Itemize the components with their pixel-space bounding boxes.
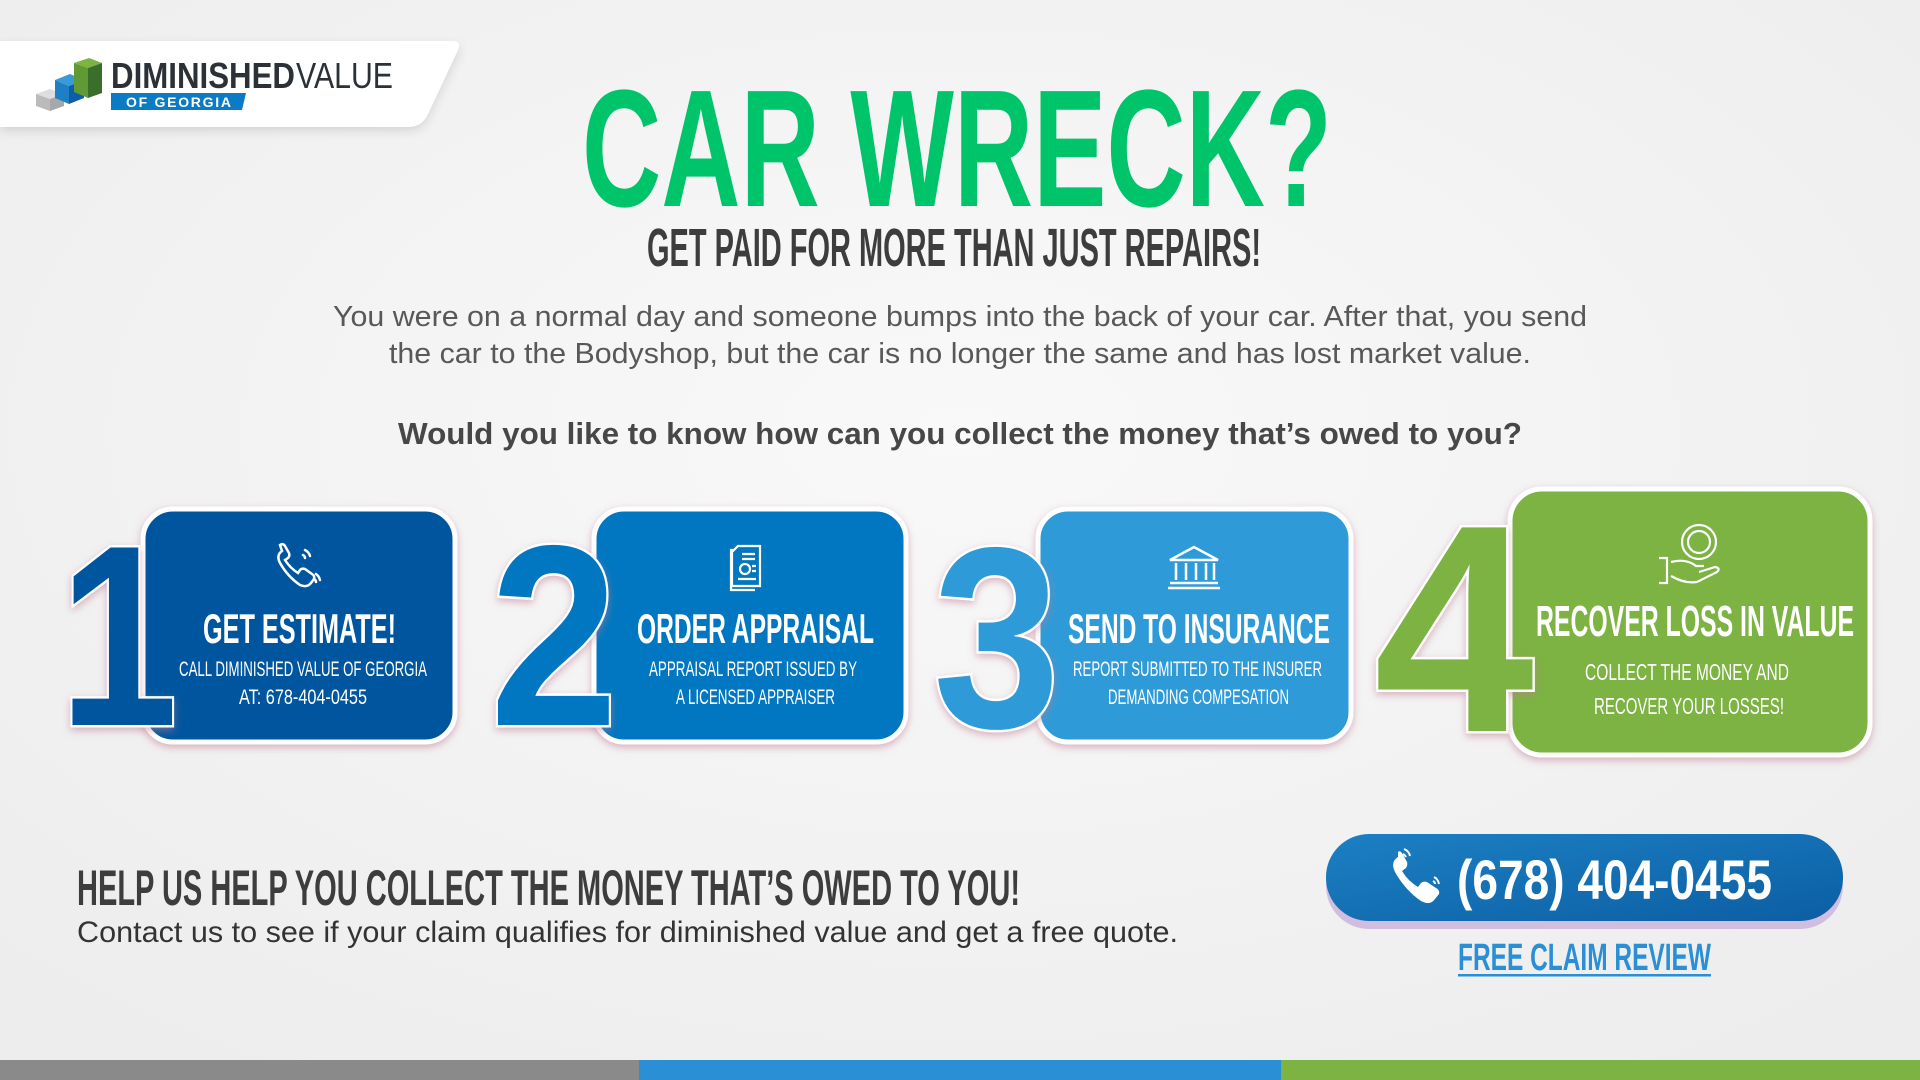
icon: bank xyxy=(1168,547,1220,588)
icon: phone xyxy=(278,544,320,586)
step 2: APPRAISAL REPORT ISSUED BY xyxy=(649,658,857,681)
step 2: A LICENSED APPRAISER xyxy=(676,686,835,709)
step 2: ORDER APPRAISAL xyxy=(637,605,874,652)
title: CAR WRECK? xyxy=(582,56,1332,242)
icon: hand with coin xyxy=(1659,525,1719,583)
step 3: DEMANDING COMPESATION xyxy=(1108,686,1289,709)
step 3 xyxy=(933,493,1351,782)
logo: OF GEORGIA xyxy=(126,94,231,110)
bottom heading: HELP US HELP YOU COLLECT THE MONEY THAT’S OWED TO YOU! xyxy=(77,860,1020,916)
number 3: 3 xyxy=(933,493,1060,782)
step 3: REPORT SUBMITTED TO THE INSURER xyxy=(1073,658,1322,681)
step 2 xyxy=(490,491,906,780)
intro paragraph xyxy=(333,301,1587,370)
question: Would you like to know how can you collect the money that’s owed to you? xyxy=(398,416,1522,451)
icon: phone xyxy=(1393,849,1439,903)
step 1: CALL DIMINISHED VALUE OF GEORGIA xyxy=(179,658,427,681)
step 4 xyxy=(1374,463,1870,794)
number 2: 2 xyxy=(490,491,618,780)
icon: cubes xyxy=(36,58,102,111)
logo xyxy=(0,41,459,127)
step 4: RECOVER YOUR LOSSES! xyxy=(1594,693,1784,719)
step 1: GET ESTIMATE! xyxy=(203,605,396,652)
step 3: SEND TO INSURANCE xyxy=(1068,605,1330,652)
icon: document xyxy=(731,546,760,590)
free claim review link: FREE CLAIM REVIEW xyxy=(1458,937,1711,979)
phone button: (678) 404-0455 xyxy=(1457,848,1772,911)
step 1: AT: 678-404-0455 xyxy=(239,686,367,709)
logo: VALUE xyxy=(296,55,393,96)
bottom color bar xyxy=(0,1060,1920,1080)
subtitle: GET PAID FOR MORE THAN JUST REPAIRS! xyxy=(647,218,1261,278)
logo: DIMINISHED xyxy=(111,55,295,96)
number 4: 4 xyxy=(1374,463,1536,794)
intro paragraph: the car to the Bodyshop, but the car is no longer the same and has lost market value. xyxy=(389,338,1531,370)
step 1 xyxy=(59,491,455,780)
number 1: 1 xyxy=(59,491,178,780)
step 4: COLLECT THE MONEY AND xyxy=(1585,659,1789,685)
bottom subtext: Contact us to see if your claim qualifies for diminished value and get a free quote. xyxy=(77,916,1178,949)
intro paragraph: You were on a normal day and someone bumps into the back of your car. After that, you send xyxy=(333,301,1587,333)
phone button xyxy=(1326,834,1843,929)
